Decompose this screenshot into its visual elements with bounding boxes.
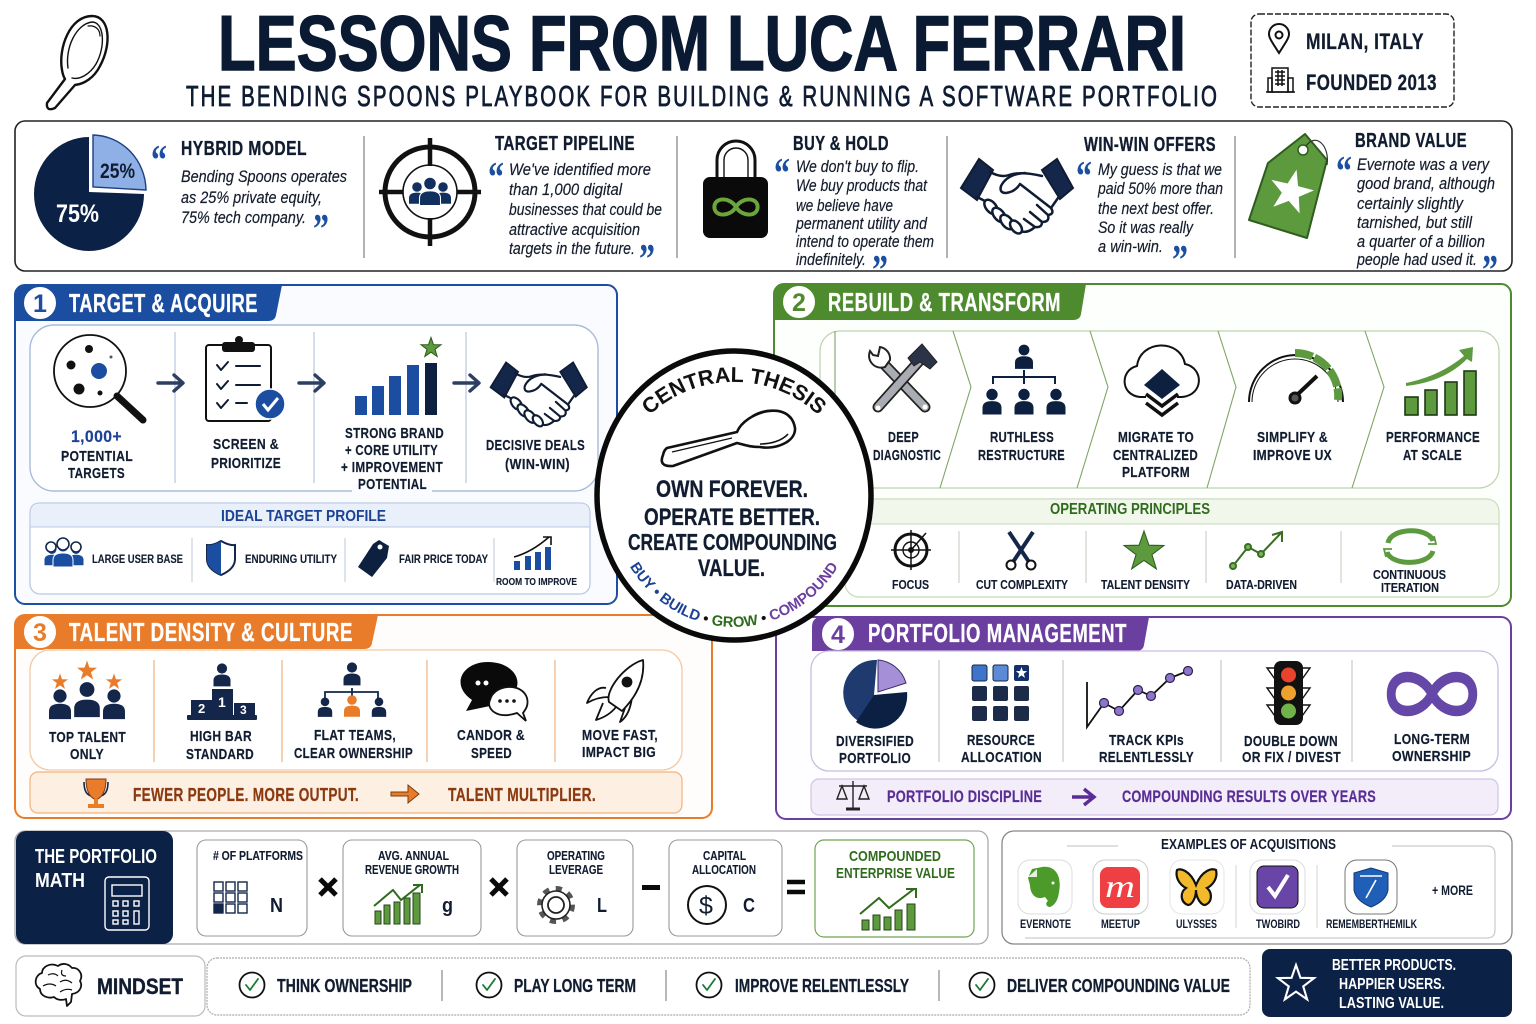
text: resource allocation: ALLOCATION <box>961 749 1042 766</box>
callout: portfolio discipline: COMPOUNDING RESULTS OVER YEARS <box>1122 788 1376 806</box>
text: brand value: “ <box>1336 149 1352 195</box>
text: target pipeline: ” <box>639 237 655 283</box>
box: growth <box>343 840 481 936</box>
icon: map pin <box>1269 24 1289 53</box>
text: buy and hold: We don't buy to flip. <box>796 158 919 176</box>
text: decisive deals <box>486 437 585 473</box>
icon: rising bars <box>514 537 551 570</box>
icon: magnifier <box>54 335 143 420</box>
text: win-win offers: ” <box>1172 238 1188 284</box>
text: brand value: people had used it. <box>1356 251 1477 269</box>
label: focus: FOCUS <box>892 578 929 592</box>
text: double down <box>1242 733 1341 766</box>
box: capital allocation <box>669 840 782 936</box>
text: high bar standard: STANDARD <box>186 746 254 763</box>
text: screen and prioritize <box>211 436 281 472</box>
text: strong brand: + CORE UTILITY <box>345 442 438 459</box>
label: continuous iteration: ITERATION <box>1381 581 1439 595</box>
icon: focus target <box>891 530 931 570</box>
text: migrate to centralized platform: MIGRATE TO <box>1118 429 1194 446</box>
heading 1: 1 <box>33 290 47 318</box>
text: hybrid model: ” <box>313 207 329 253</box>
icon: rocket <box>587 660 643 722</box>
text: target pipeline: We've identified more <box>509 161 651 179</box>
thesis statement: VALUE. <box>698 555 765 582</box>
box: leverage: LEVERAGE <box>549 863 603 877</box>
icon: cycle <box>1384 531 1436 562</box>
text: long-term ownership <box>1392 731 1471 765</box>
text: diversified portfolio: DIVERSIFIED <box>836 733 914 750</box>
arc heading: CENTRAL THESIS <box>643 367 826 413</box>
icon: flat teams <box>318 662 386 717</box>
math heading <box>35 846 157 892</box>
text: resource allocation <box>961 732 1042 766</box>
text: target pipeline: TARGET PIPELINE <box>495 133 635 155</box>
icon: data line <box>1230 532 1282 569</box>
principle: think ownership <box>240 972 412 998</box>
icon: trophy <box>84 779 108 808</box>
panel 3: talent density and culture <box>15 615 712 818</box>
text: long-term ownership: OWNERSHIP <box>1392 748 1471 765</box>
icon: price tag <box>358 540 389 577</box>
callout: portfolio discipline: PORTFOLIO DISCIPLINE <box>887 788 1042 806</box>
box: growth: REVENUE GROWTH <box>365 863 459 877</box>
text: performance at scale: AT SCALE <box>1403 447 1462 464</box>
panel: mindset principles <box>207 958 1250 1015</box>
icon: allocation grid <box>972 665 1029 721</box>
icon: green star <box>1124 531 1164 569</box>
icon: padlock with infinity <box>703 141 768 238</box>
heading 2 <box>774 284 1086 320</box>
icon: users <box>44 538 84 567</box>
callout: better products: BETTER PRODUCTS. <box>1332 957 1456 974</box>
label: EVERNOTE <box>1020 919 1071 931</box>
text: buy and hold: BUY & HOLD <box>793 133 889 155</box>
examples heading: EXAMPLES OF ACQUISITIONS <box>1161 837 1336 853</box>
text: top talent only: ONLY <box>70 746 104 763</box>
label: enduring utility: ENDURING UTILITY <box>245 552 337 566</box>
principle: deliver compounding value <box>970 972 1230 998</box>
icon: podium: 2 <box>198 701 205 716</box>
text: strong brand <box>341 425 444 494</box>
text: win-win offers: “ <box>1076 154 1092 200</box>
heading 4 <box>812 617 1149 651</box>
icon: performance chart <box>1405 347 1476 415</box>
text: brand value: certainly slightly <box>1357 195 1465 213</box>
profile heading: IDEAL TARGET PROFILE <box>221 508 386 525</box>
box: capital allocation: ALLOCATION <box>692 863 756 877</box>
panel 2: rebuild and transform <box>774 284 1511 606</box>
text: brand value: a quarter of a billion <box>1357 233 1485 251</box>
icon: cloud platform <box>1125 345 1199 415</box>
thesis statement <box>628 476 837 582</box>
text: target pipeline <box>488 133 662 283</box>
arrow <box>158 375 183 391</box>
icon: tools <box>869 344 937 410</box>
text: track kpis: RELENTLESSLY <box>1099 749 1194 766</box>
principle: improve relentlessly: IMPROVE RELENTLESSLY <box>735 976 909 996</box>
text: buy and hold: ” <box>872 248 888 294</box>
text: buy and hold: “ <box>774 151 790 197</box>
box: capital allocation: CAPITAL <box>703 849 746 863</box>
text: brand value: good brand, although <box>1357 175 1495 193</box>
icon: traffic light <box>1267 661 1310 725</box>
logo: evernote <box>1018 860 1072 931</box>
icon: pie chart <box>843 660 907 729</box>
text: simplify and improve ux: SIMPLIFY & <box>1257 429 1328 446</box>
arrow <box>454 375 479 391</box>
icon: podium: 1 <box>218 694 226 710</box>
text: hybrid model: Bending Spoons operates <box>181 168 347 186</box>
icon: star outline <box>1278 965 1314 999</box>
text: performance at scale <box>1386 429 1480 464</box>
icon: top talent <box>49 660 125 719</box>
text: hybrid model <box>151 138 347 253</box>
text: brand value: BRAND VALUE <box>1355 130 1467 152</box>
logo: meetup: m <box>1105 868 1135 904</box>
operator: times <box>491 879 507 895</box>
box: platforms: # OF PLATFORMS <box>213 849 303 863</box>
heading 3: TALENT DENSITY & CULTURE <box>69 617 353 647</box>
text: top talent only <box>49 729 126 763</box>
text: buy and hold <box>774 133 934 294</box>
text: migrate to centralized platform <box>1113 429 1198 481</box>
icon: kpi line <box>1087 666 1192 727</box>
icon: podium <box>187 663 257 720</box>
icon: spoon <box>47 16 108 109</box>
heading 2: REBUILD & TRANSFORM <box>828 287 1061 317</box>
text: buy and hold: indefinitely. <box>796 251 866 269</box>
text: flat teams: CLEAR OWNERSHIP <box>294 745 413 762</box>
text: performance at scale: PERFORMANCE <box>1386 429 1480 446</box>
thesis statement: CREATE COMPOUNDING <box>628 529 837 555</box>
label: continuous iteration <box>1373 568 1446 595</box>
text: move fast: IMPACT BIG <box>582 744 656 761</box>
pie chart: hybrid model: 25% <box>100 160 135 183</box>
central thesis circle <box>594 348 874 643</box>
text: buy and hold: intend to operate them <box>796 233 934 251</box>
panel: quotes strip <box>15 121 1512 294</box>
text: strong brand: + IMPROVEMENT <box>341 459 443 476</box>
text: resource allocation: RESOURCE <box>967 732 1035 749</box>
text: potential targets: TARGETS <box>68 465 125 482</box>
text: buy and hold: We buy products that <box>796 177 928 195</box>
text: hybrid model: “ <box>151 138 167 184</box>
label: ULYSSES <box>1176 919 1217 931</box>
mindset heading: MINDSET <box>97 974 183 999</box>
panel: operating principles <box>845 499 1499 597</box>
text: target pipeline: targets in the future. <box>509 240 635 258</box>
text: brand value: tarnished, but still <box>1357 214 1473 232</box>
text: win-win offers: the next best offer. <box>1098 200 1214 218</box>
text: hybrid model: 75% tech company. <box>181 209 306 227</box>
text: target pipeline: attractive acquisition <box>509 221 640 239</box>
text: simplify and improve ux: IMPROVE UX <box>1253 447 1332 464</box>
icon: handshake <box>491 362 587 428</box>
text: move fast <box>582 727 658 761</box>
box: capital allocation: $ <box>699 892 713 920</box>
text: ruthless restructure <box>978 429 1065 464</box>
text: candor and speed: SPEED <box>471 745 512 762</box>
icon: shield <box>207 541 235 575</box>
text: potential targets: POTENTIAL <box>61 448 133 465</box>
text: potential targets <box>61 427 133 482</box>
text: flat teams: FLAT TEAMS, <box>314 727 396 744</box>
info box: location and founding <box>1251 14 1454 107</box>
text: high bar standard: HIGH BAR <box>190 728 252 745</box>
box: platforms: N <box>270 895 283 917</box>
icon: brand tag <box>1249 134 1327 238</box>
principle: play long term: PLAY LONG TERM <box>514 976 636 996</box>
panel: mindset <box>16 956 205 1016</box>
callout: better products: LASTING VALUE. <box>1339 995 1444 1012</box>
operator: times <box>320 879 336 895</box>
text: simplify and improve ux <box>1253 429 1332 464</box>
text: strong brand: STRONG BRAND <box>345 425 444 442</box>
principles heading: OPERATING PRINCIPLES <box>1050 501 1210 518</box>
panel: examples of acquisitions <box>1002 831 1512 944</box>
icon: clipboard <box>206 336 285 421</box>
icon: chat bubbles <box>461 662 528 721</box>
text: long-term ownership: LONG-TERM <box>1394 731 1470 748</box>
heading 4: PORTFOLIO MANAGEMENT <box>868 618 1127 648</box>
icon: scales <box>837 781 869 809</box>
logo: meetup <box>1093 860 1148 931</box>
arrow <box>299 375 324 391</box>
math heading: THE PORTFOLIO <box>35 846 157 868</box>
text: screen and prioritize: SCREEN & <box>213 436 279 453</box>
text: deep diagnostic: DIAGNOSTIC <box>873 447 941 464</box>
label: talent density: TALENT DENSITY <box>1101 578 1191 592</box>
principle: improve relentlessly <box>696 972 909 998</box>
bar chart: strong brand <box>355 338 441 415</box>
text: track kpis: TRACK KPIs <box>1109 732 1184 749</box>
box: leverage: L <box>597 895 607 917</box>
text: win-win offers <box>1076 134 1223 284</box>
logo: ulysses <box>1170 860 1224 931</box>
panel 4: portfolio management <box>776 617 1511 819</box>
text: target pipeline: than 1,000 digital <box>509 181 623 199</box>
box: compounded enterprise value: COMPOUNDED <box>849 848 941 865</box>
box: leverage <box>517 840 633 936</box>
box: platforms <box>197 840 307 936</box>
callout: talent multiplier <box>30 772 682 813</box>
heading 1 <box>15 285 282 321</box>
icon: building <box>1266 68 1295 92</box>
text: win-win offers: My guess is that we <box>1098 161 1222 179</box>
text: win-win offers: WIN-WIN OFFERS <box>1084 134 1216 156</box>
callout: portfolio discipline <box>811 779 1498 815</box>
text: track kpis <box>1099 732 1194 766</box>
text: decisive deals: DECISIVE DEALS <box>486 437 585 454</box>
logo: remember the milk <box>1326 860 1418 931</box>
math heading: MATH <box>35 870 85 892</box>
text: decisive deals: (WIN-WIN) <box>505 456 570 473</box>
icon: brain <box>36 964 81 1006</box>
icon: gauge <box>1249 353 1343 403</box>
text: double down: OR FIX / DIVEST <box>1242 749 1341 766</box>
panel 1: target and acquire <box>15 285 617 604</box>
box: growth: AVG. ANNUAL <box>378 849 449 863</box>
text: buy and hold: we believe have <box>796 197 893 215</box>
text: hybrid model: HYBRID MODEL <box>181 138 307 160</box>
text: migrate to centralized platform: PLATFORM <box>1122 464 1190 481</box>
logo: twobird <box>1250 860 1305 931</box>
text: ruthless restructure: RUTHLESS <box>990 429 1054 446</box>
text: high bar standard <box>186 728 254 763</box>
text: buy and hold: permanent utility and <box>795 215 928 233</box>
box: compounded enterprise value <box>815 840 974 937</box>
text: diversified portfolio: PORTFOLIO <box>839 750 911 767</box>
text: win-win offers: a win-win. <box>1098 238 1163 256</box>
icon: spoon <box>662 410 795 466</box>
arrow <box>1072 789 1094 805</box>
text: flat teams <box>294 727 413 762</box>
box: compounded enterprise value: ENTERPRISE VALUE <box>836 865 955 882</box>
text: potential targets: 1,000+ <box>71 427 122 446</box>
heading 1: TARGET & ACQUIRE <box>69 288 258 318</box>
label: room to improve: ROOM TO IMPROVE <box>496 576 577 588</box>
text: brand value <box>1336 130 1498 294</box>
heading 4: 4 <box>831 621 845 649</box>
label: TWOBIRD <box>1256 919 1300 931</box>
text: candor and speed <box>457 727 525 762</box>
heading 2: 2 <box>792 289 806 317</box>
operator: minus <box>642 885 660 890</box>
title: LESSONS FROM LUCA FERRARI <box>218 0 1186 87</box>
text: win-win offers: So it was really <box>1098 219 1194 237</box>
text: double down: DOUBLE DOWN <box>1244 733 1338 750</box>
label: continuous iteration: CONTINUOUS <box>1373 568 1446 582</box>
box: capital allocation: C <box>743 895 755 917</box>
text: brand value: ” <box>1482 248 1498 294</box>
label: large user base: LARGE USER BASE <box>92 552 183 566</box>
text: top talent only: TOP TALENT <box>49 729 126 746</box>
icon: calculator <box>105 877 149 930</box>
callout: better products <box>1262 949 1512 1017</box>
text: ruthless restructure: RESTRUCTURE <box>978 447 1065 464</box>
text: brand value: Evernote was a very <box>1357 156 1491 174</box>
label: data-driven: DATA-DRIVEN <box>1226 578 1297 592</box>
icon: handshake <box>961 159 1073 236</box>
icon: org chart <box>982 345 1066 414</box>
icon: scissors <box>1006 532 1036 570</box>
label: MEETUP <box>1101 919 1140 931</box>
icon: podium: 3 <box>240 703 247 717</box>
operator: equals <box>787 882 805 892</box>
callout: talent multiplier: TALENT MULTIPLIER. <box>448 785 596 805</box>
callout: better products: HAPPIER USERS. <box>1339 976 1445 993</box>
principle: play long term <box>476 972 636 998</box>
heading 3: 3 <box>33 619 47 647</box>
location text: MILAN, ITALY <box>1306 29 1424 54</box>
founded text: FOUNDED 2013 <box>1306 70 1437 95</box>
text: hybrid model: as 25% private equity, <box>181 189 322 207</box>
text: screen and prioritize: PRIORITIZE <box>211 455 281 472</box>
label: plus more: + MORE <box>1432 883 1473 898</box>
label: fair price today: FAIR PRICE TODAY <box>399 552 488 566</box>
text: deep diagnostic: DEEP <box>888 429 919 446</box>
text: strong brand: POTENTIAL <box>358 476 427 493</box>
icon: infinity <box>1391 677 1473 711</box>
thesis statement: OPERATE BETTER. <box>644 504 820 531</box>
arrow <box>391 785 419 803</box>
principle: think ownership: THINK OWNERSHIP <box>277 976 412 996</box>
box: growth: g <box>442 895 453 917</box>
heading 3 <box>15 615 378 649</box>
panel: portfolio math <box>15 831 988 944</box>
box: leverage: OPERATING <box>547 849 605 863</box>
text: move fast: MOVE FAST, <box>582 727 658 744</box>
text: migrate to centralized platform: CENTRALIZED <box>1113 447 1198 464</box>
text: diversified portfolio <box>836 733 914 767</box>
text: target pipeline: businesses that could be <box>509 201 662 219</box>
arc tagline: BUY • BUILD • GROW • COMPOUND <box>630 562 836 627</box>
principle: deliver compounding value: DELIVER COMPOUNDING VALUE <box>1007 976 1230 996</box>
pie chart: hybrid model: 75% <box>56 200 99 228</box>
panel: ideal target profile <box>30 503 590 594</box>
text: candor and speed: CANDOR & <box>457 727 525 744</box>
text: deep diagnostic <box>873 429 941 464</box>
label: cut complexity: CUT COMPLEXITY <box>976 578 1069 592</box>
text: win-win offers: paid 50% more than <box>1097 180 1223 198</box>
text: target pipeline: “ <box>488 155 504 201</box>
callout: talent multiplier: FEWER PEOPLE. MORE OUTPUT. <box>133 785 359 805</box>
thesis statement: OWN FOREVER. <box>656 476 808 503</box>
icon: target <box>379 138 481 246</box>
pie chart: hybrid model <box>34 135 146 251</box>
label: REMEMBERTHEMILK <box>1326 919 1418 931</box>
